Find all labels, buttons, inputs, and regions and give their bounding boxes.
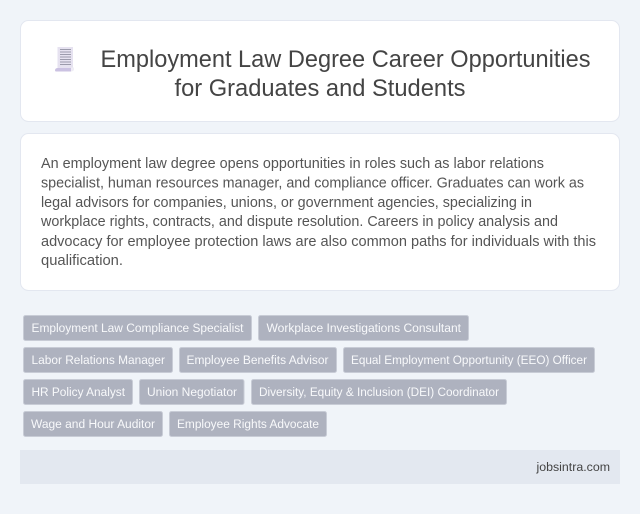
title: Employment Law Degree Career Opportunities <box>100 46 590 73</box>
tag: Wage and Hour Auditor <box>24 412 162 436</box>
tag: Diversity, Equity & Inclusion (DEI) Coordinator: Diversity, Equity & Inclusion (DEI) Coordinator <box>259 385 499 399</box>
tag: Employee Rights Advocate: Employee Rights Advocate <box>177 417 319 431</box>
tag: Workplace Investigations Consultant: Workplace Investigations Consultant <box>266 321 462 335</box>
description text: specialist, human resources manager, and compliance officer. Graduates can work as <box>41 176 584 192</box>
panel: header card <box>20 20 620 122</box>
description text: workplace rights, contracts, and dispute resolution. Careers in policy analysis and <box>40 214 558 230</box>
tag: Workplace Investigations Consultant <box>258 316 468 340</box>
tag: Diversity, Equity & Inclusion (DEI) Coordinator <box>252 380 506 404</box>
title: for Graduates and Students <box>174 75 466 102</box>
description text: An employment law degree opens opportunities in roles such as labor relations <box>41 156 544 172</box>
tag: Union Negotiator <box>140 380 244 404</box>
tag: Employee Benefits Advisor: Employee Benefits Advisor <box>186 353 328 367</box>
tag: Employee Rights Advocate <box>170 412 326 436</box>
tag: Labor Relations Manager <box>24 348 172 372</box>
tag: Employee Benefits Advisor <box>180 348 336 372</box>
footer bar <box>20 450 620 484</box>
tag: HR Policy Analyst <box>24 380 132 404</box>
description text <box>40 156 596 269</box>
tag: Wage and Hour Auditor: Wage and Hour Auditor <box>31 417 155 431</box>
tag: HR Policy Analyst: HR Policy Analyst <box>32 385 126 399</box>
title <box>100 46 590 102</box>
tag: Union Negotiator: Union Negotiator <box>147 385 237 399</box>
description text: legal advisors for companies, unions, or government agencies, specializing in <box>41 195 532 211</box>
tag: Equal Employment Opportunity (EEO) Officer: Equal Employment Opportunity (EEO) Officer <box>351 353 587 367</box>
tag: Employment Law Compliance Specialist <box>24 316 252 340</box>
panel: description card <box>20 134 620 290</box>
icon: document scroll <box>55 47 74 72</box>
description text: advocacy for employee protection laws are also common paths for individuals with this <box>41 234 596 250</box>
panel: career tags <box>24 316 594 436</box>
tag: Labor Relations Manager: Labor Relations Manager <box>32 353 165 367</box>
footer bar: jobsintra.com <box>536 460 610 474</box>
description text: qualification. <box>41 253 123 269</box>
tag: Equal Employment Opportunity (EEO) Officer <box>344 348 594 372</box>
tag: Employment Law Compliance Specialist: Employment Law Compliance Specialist <box>32 321 244 335</box>
